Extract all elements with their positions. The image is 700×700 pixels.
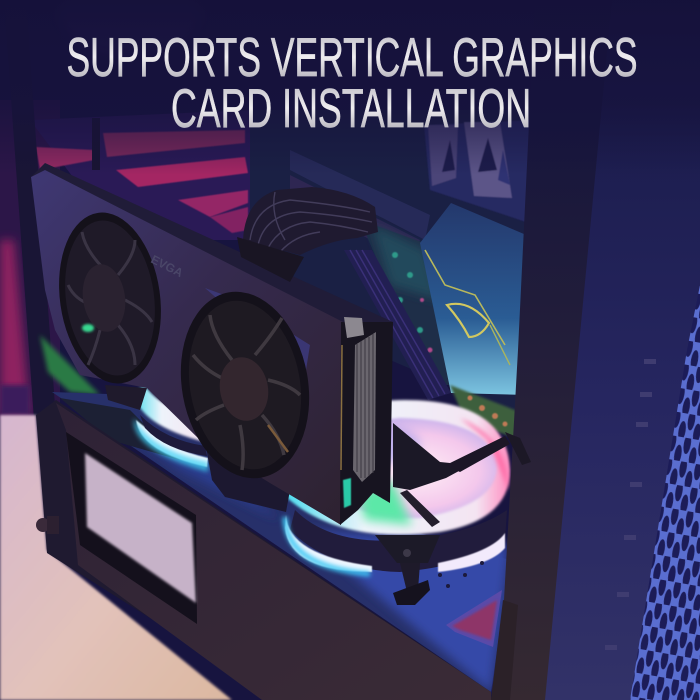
left case frame: [4, 0, 56, 420]
pillar front strip: [491, 600, 518, 700]
EVGA brand text: EVGA: [149, 252, 186, 280]
fan two lit centre: [307, 409, 503, 521]
title: [66, 26, 638, 139]
pillar notches: [605, 359, 656, 650]
green motherboard components: [40, 335, 520, 438]
pillar blue section: [540, 0, 700, 700]
graphics card: [31, 163, 393, 525]
ROG heatsink with logo: [420, 203, 531, 395]
GPU top strip: [31, 163, 393, 322]
post under first fan: [105, 385, 147, 410]
mesh side panel: [630, 285, 700, 700]
GPU power connector: [237, 237, 304, 282]
right case pillar: [491, 0, 700, 700]
GPU lit panel: [205, 288, 310, 370]
fan sticker and cable: [393, 423, 510, 527]
thumb screw: [36, 516, 59, 534]
fan one: [49, 206, 171, 390]
GPU heat fins: [353, 332, 376, 482]
GPU gold edge: [341, 345, 342, 470]
fan bracket: [375, 535, 440, 605]
fan two white ring: [286, 400, 510, 535]
GPU side backplate: [340, 322, 393, 525]
top dark overlay: [0, 0, 700, 175]
expansion slots with pink glow: [36, 118, 248, 233]
GPU cyan LED: [343, 478, 351, 508]
case bottom rail: [36, 400, 491, 700]
case bottom: PSU shroud: [36, 392, 510, 700]
table surface: [0, 415, 232, 700]
shroud top plate: [52, 392, 510, 692]
GPU front shroud: [31, 170, 343, 525]
PSU opening and label: [66, 432, 197, 624]
ribbon cable: [344, 250, 451, 400]
ROG top graphic: [424, 120, 535, 225]
shroud front face: [56, 403, 491, 700]
fan one RGB rings: [134, 385, 212, 472]
GPU power cables: [237, 187, 378, 282]
clip on pillar: [505, 432, 531, 465]
mounting posts: [206, 447, 290, 512]
fan two lower ring: [285, 510, 507, 574]
motherboard area: [250, 110, 530, 420]
green LED: [82, 324, 94, 332]
lower vent opening: [438, 561, 502, 647]
pillar dark section: [491, 0, 612, 700]
fan two: [167, 281, 323, 489]
GPU silver cap: [344, 317, 364, 338]
